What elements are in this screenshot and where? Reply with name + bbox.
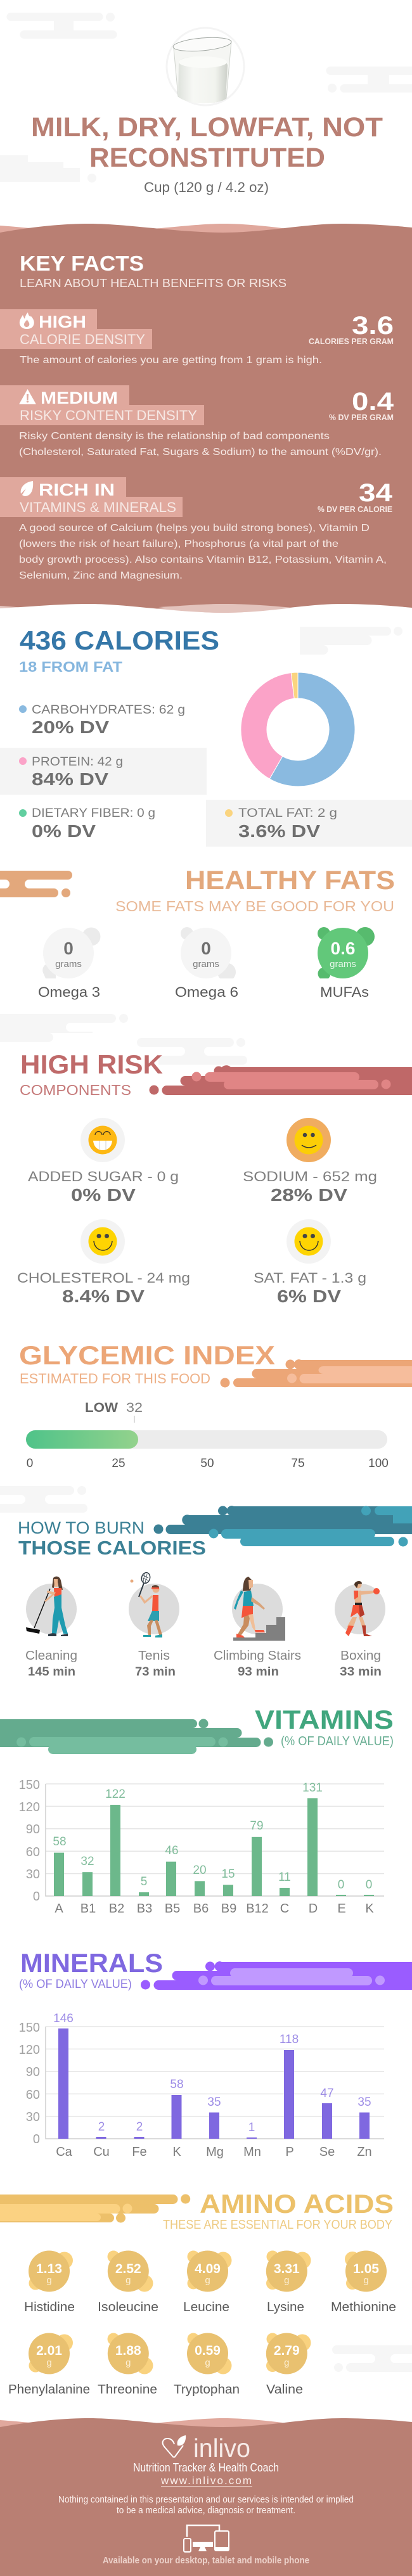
fact: rich in vitamins and minerals: body growth process). Also contains Vitamin B12, Potassium, Vitamin A, xyxy=(19,554,387,565)
title: RECONSTITUTED xyxy=(89,143,325,173)
item: saturated fat: SAT. FAT - 1.3 g xyxy=(254,1270,366,1286)
chart: glycemic index bar: 32 xyxy=(126,1400,143,1415)
item: saturated fat: 6% DV xyxy=(277,1286,341,1306)
stat: valine: Valine xyxy=(266,2383,303,2397)
stat: omega 6: 0 xyxy=(201,939,211,958)
chart: minerals bar chart: 150 xyxy=(19,2021,40,2035)
item: sodium: 28% DV xyxy=(271,1185,347,1205)
heading: glycemic index: GLYCEMIC INDEX xyxy=(19,1340,275,1370)
stat: methionine: g xyxy=(363,2275,369,2286)
heading: key facts: LEARN ABOUT HEALTH BENEFITS OR RISKS xyxy=(20,276,286,290)
chart: minerals bar chart: Ca xyxy=(56,2145,73,2159)
availability note: Available on your desktop, tablet and mobile phone xyxy=(103,2556,309,2566)
chart: vitamins bar chart: B3 xyxy=(137,1902,152,1916)
stat: omega 6: Omega 6 xyxy=(175,984,238,1000)
fact: medium risky content density: MEDIUM xyxy=(41,388,118,407)
logo: inlivo xyxy=(163,2433,250,2463)
activity: boxing: Boxing xyxy=(340,1649,381,1663)
chart: minerals bar chart: 2 xyxy=(136,2120,143,2134)
heading: amino acids: AMINO ACIDS xyxy=(200,2189,394,2219)
fact: high calorie density: CALORIES PER GRAM xyxy=(309,337,394,346)
chart: minerals bar chart: Mn xyxy=(243,2145,261,2159)
chart: vitamins bar chart: 0 xyxy=(338,1878,344,1892)
stat: tryptophan xyxy=(174,2333,240,2397)
chart: vitamins bar chart: D xyxy=(309,1902,318,1916)
chart: vitamins bar chart: B1 xyxy=(80,1902,96,1916)
chart: minerals bar chart: 58 xyxy=(170,2078,184,2091)
item: cholesterol: 8.4% DV xyxy=(62,1286,145,1306)
chart: glycemic index bar: 25 xyxy=(112,1457,126,1470)
stat: phenylalanine: g xyxy=(46,2357,52,2368)
activity: climbing stairs: 93 min xyxy=(238,1665,279,1679)
chart: glycemic index bar: LOW xyxy=(85,1400,118,1415)
heading: key facts: KEY FACTS xyxy=(20,252,144,275)
heading: vitamins: VITAMINS xyxy=(255,1705,394,1734)
legend: dietary fiber xyxy=(19,806,155,841)
chart: vitamins bar chart: 15 xyxy=(221,1868,235,1881)
chart: minerals bar chart: 146 xyxy=(53,2012,74,2025)
heading: minerals: (% OF DAILY VALUE) xyxy=(19,1977,132,1991)
chart: minerals bar chart: Fe xyxy=(132,2145,147,2159)
activity: tennis xyxy=(129,1572,179,1679)
serving size: Cup (120 g / 4.2 oz) xyxy=(144,179,269,195)
heading: vitamins xyxy=(255,1705,394,1748)
heading: amino acids xyxy=(163,2189,394,2232)
heading: how to burn those calories xyxy=(18,1518,206,1559)
activity: boxing xyxy=(335,1581,385,1679)
panel: vitamins xyxy=(0,1705,394,1916)
fact: rich in vitamins and minerals: RICH IN xyxy=(39,480,115,499)
activity: climbing stairs xyxy=(214,1577,301,1679)
chart: vitamins bar chart: 30 xyxy=(26,1868,40,1881)
title xyxy=(31,112,383,173)
chart: vitamins bar chart: 11 xyxy=(278,1871,291,1884)
icon: glass of milk xyxy=(167,28,244,105)
stat: lysine: 3.31 xyxy=(274,2262,300,2276)
heading: key facts xyxy=(20,252,286,290)
chart: minerals bar chart: 2 xyxy=(98,2120,105,2134)
fact: rich in vitamins and minerals: (lowers the risk of heart failure), Phosphorus (a vital part of the xyxy=(19,539,338,549)
fact: rich in vitamins and minerals: VITAMINS & MINERALS xyxy=(20,499,176,515)
chart: vitamins bar chart: 20 xyxy=(193,1864,207,1877)
activity: boxing: 33 min xyxy=(340,1665,382,1679)
icon: devices xyxy=(184,2525,229,2552)
heading: high risk xyxy=(20,1049,163,1098)
chart: vitamins bar chart xyxy=(19,1778,384,1916)
fact: high calorie density: 3.6 xyxy=(352,312,394,340)
stat: lysine: Lysine xyxy=(267,2300,304,2314)
panel: minerals xyxy=(19,1948,412,2159)
fact: high calorie density xyxy=(0,309,394,366)
heading: how to burn those calories: THOSE CALORIES xyxy=(18,1537,206,1559)
heading: how to burn those calories: HOW TO BURN xyxy=(18,1518,145,1537)
activity: tennis: 73 min xyxy=(135,1665,176,1679)
panel: how to burn those calories xyxy=(18,1506,412,1679)
chart: vitamins bar chart: 150 xyxy=(19,1778,40,1792)
stat: isoleucine: Isoleucine xyxy=(98,2300,158,2314)
activity: cleaning: 145 min xyxy=(28,1665,75,1679)
stat: omega 6: grams xyxy=(193,959,219,970)
chart: minerals bar chart: 90 xyxy=(26,2065,40,2079)
chart: glycemic index bar: 75 xyxy=(291,1457,305,1470)
chart: minerals bar chart: 47 xyxy=(320,2087,334,2100)
legend: dietary fiber: 0% DV xyxy=(32,821,96,841)
stat: omega 6 xyxy=(175,927,238,1000)
stat: histidine: g xyxy=(46,2275,52,2286)
chart: vitamins bar chart: B9 xyxy=(221,1902,236,1916)
legend: total fat xyxy=(206,800,412,847)
chart: vitamins bar chart: 0 xyxy=(33,1890,40,1904)
icon: grinning face xyxy=(89,1125,117,1155)
item: added sugar: 0% DV xyxy=(71,1185,136,1205)
stat: threonine: Threonine xyxy=(98,2383,157,2397)
stat: tryptophan: Tryptophan xyxy=(174,2383,240,2397)
stat: tryptophan: 0.59 xyxy=(195,2343,221,2358)
disclaimer: Nothing contained in this presentation and our services is intended or implied xyxy=(58,2494,354,2505)
heading: minerals: MINERALS xyxy=(20,1948,163,1978)
chart: minerals bar chart: 35 xyxy=(207,2096,221,2109)
fact: medium risky content density: Risky Content density is the relationship of bad components xyxy=(19,431,330,442)
chart: glycemic index bar: 100 xyxy=(368,1457,389,1470)
item: cholesterol xyxy=(17,1219,190,1306)
chart: minerals bar chart: 35 xyxy=(357,2096,371,2109)
chart: minerals bar chart: 1 xyxy=(248,2121,255,2134)
fact: medium risky content density: % DV PER GRAM xyxy=(329,413,394,422)
fact: rich in vitamins and minerals: A good source of Calcium (helps you build strong bones), Vitamin D xyxy=(19,523,370,534)
chart: vitamins bar chart: 60 xyxy=(26,1845,40,1859)
panel: healthy fats xyxy=(0,865,395,1000)
chart: vitamins bar chart: K xyxy=(365,1902,374,1916)
chart: glycemic index bar: 50 xyxy=(200,1457,214,1470)
fact: medium risky content density: 0.4 xyxy=(352,388,394,416)
chart: vitamins bar chart: E xyxy=(337,1902,346,1916)
panel: amino acids xyxy=(0,2189,396,2397)
stat: valine xyxy=(266,2333,311,2397)
website link: www.inlivo.com xyxy=(160,2475,252,2487)
stat: threonine: 1.88 xyxy=(115,2343,141,2358)
heading: vitamins: (% OF DAILY VALUE) xyxy=(281,1734,394,1748)
chart: minerals bar chart: 60 xyxy=(26,2088,40,2102)
decoration band: yellow xyxy=(0,2194,190,2223)
stat: threonine: g xyxy=(126,2357,131,2368)
decoration band: orange xyxy=(221,1359,412,1388)
chart: vitamins bar chart: C xyxy=(280,1902,289,1916)
chart: minerals bar chart: Se xyxy=(319,2145,335,2159)
fact: high calorie density: The amount of calories you are getting from 1 gram is high. xyxy=(20,355,322,366)
fact: high calorie density: HIGH xyxy=(39,312,86,331)
chart: vitamins bar chart: 120 xyxy=(19,1800,40,1814)
heading: healthy fats: HEALTHY FATS xyxy=(185,865,395,895)
chart: vitamins bar chart: 79 xyxy=(250,1819,264,1833)
chart: minerals bar chart: Mg xyxy=(206,2145,224,2159)
stat: tryptophan: g xyxy=(205,2357,210,2368)
stat: isoleucine: 2.52 xyxy=(115,2262,141,2276)
stat: isoleucine: g xyxy=(126,2275,131,2286)
legend: protein: 84% DV xyxy=(32,769,108,789)
fact: medium risky content density xyxy=(0,385,394,458)
panel: glycemic index xyxy=(19,1340,412,1470)
chart: vitamins bar chart: B12 xyxy=(246,1902,269,1916)
heading: calories xyxy=(19,625,219,675)
stat: mufas: grams xyxy=(330,959,356,970)
chart: vitamins bar chart: 90 xyxy=(26,1823,40,1836)
chart: vitamins bar chart: 46 xyxy=(165,1844,179,1857)
icon: person sweeping xyxy=(26,1577,68,1636)
stat: mufas: MUFAs xyxy=(320,984,369,1000)
legend: dietary fiber: DIETARY FIBER: 0 g xyxy=(32,806,155,820)
stat: mufas: 0.6 xyxy=(331,939,355,958)
fact: medium risky content density: (Cholesterol, Saturated Fat, Sugars & Sodium) to the amount (%DV/gr). xyxy=(19,447,382,458)
chart: minerals bar chart: Cu xyxy=(93,2145,110,2159)
stat: leucine: g xyxy=(205,2275,210,2286)
title: MILK, DRY, LOWFAT, NOT xyxy=(31,112,383,143)
stat: phenylalanine xyxy=(8,2333,90,2397)
chart: minerals bar chart: 118 xyxy=(280,2033,299,2046)
activity: tennis: Tenis xyxy=(138,1649,170,1663)
decoration band: red xyxy=(150,1065,412,1095)
heading: high risk: COMPONENTS xyxy=(20,1082,131,1098)
icon: smiling face xyxy=(294,1125,323,1155)
chart: vitamins bar chart: 122 xyxy=(105,1788,126,1801)
chart: vitamins bar chart: B6 xyxy=(193,1902,209,1916)
stat: histidine: Histidine xyxy=(24,2300,75,2314)
chart: vitamins bar chart: 131 xyxy=(302,1781,323,1795)
stat: phenylalanine: 2.01 xyxy=(36,2343,62,2358)
heading: healthy fats: SOME FATS MAY BE GOOD FOR YOU xyxy=(115,898,394,914)
heading: calories: 436 CALORIES xyxy=(20,625,219,655)
chart: vitamins bar chart: 32 xyxy=(80,1855,94,1868)
stat: valine: g xyxy=(284,2357,289,2368)
stat: methionine: 1.05 xyxy=(353,2262,379,2276)
item: cholesterol: CHOLESTEROL - 24 mg xyxy=(17,1270,190,1286)
chart: minerals bar chart: 120 xyxy=(19,2043,40,2057)
panel: calories xyxy=(0,625,412,847)
chart: minerals bar chart: Zn xyxy=(357,2145,372,2159)
icon: smiling face xyxy=(89,1227,117,1256)
stat: phenylalanine: Phenylalanine xyxy=(8,2383,90,2397)
stat: leucine: Leucine xyxy=(183,2300,229,2314)
disclaimer: to be a medical advice, diagnosis or treatment. xyxy=(117,2505,295,2516)
fact: rich in vitamins and minerals: % DV PER CALORIE xyxy=(318,505,392,514)
icon: stairs and climber xyxy=(233,1577,285,1641)
chart: minerals bar chart xyxy=(19,2012,384,2159)
activity: climbing stairs: Climbing Stairs xyxy=(214,1649,301,1663)
legend: carbohydrates: 20% DV xyxy=(32,717,109,737)
icon: tennis player xyxy=(131,1572,162,1637)
item: added sugar: ADDED SUGAR - 0 g xyxy=(28,1169,179,1184)
chart: glycemic index bar: 0 xyxy=(27,1457,33,1470)
disclaimer xyxy=(58,2494,354,2516)
icon: flame xyxy=(20,312,34,329)
chart: minerals bar chart: P xyxy=(285,2145,294,2159)
fact: medium risky content density: RISKY CONTENT DENSITY xyxy=(20,407,197,423)
fact: rich in vitamins and minerals xyxy=(0,477,393,581)
icon: boxer xyxy=(345,1581,380,1636)
heading: minerals xyxy=(19,1948,163,1991)
chart: minerals bar chart: K xyxy=(172,2145,181,2159)
stat: methionine: Methionine xyxy=(331,2300,396,2314)
stat: leucine xyxy=(183,2251,232,2314)
stat: isoleucine xyxy=(98,2251,158,2314)
item: saturated fat xyxy=(254,1219,366,1306)
decoration band: teal xyxy=(153,1506,412,1546)
heading: healthy fats xyxy=(115,865,395,914)
logo: inlivo: inlivo xyxy=(193,2433,250,2463)
icon: smiling face xyxy=(294,1227,323,1256)
legend: carbohydrates xyxy=(19,703,185,737)
stat: mufas xyxy=(318,927,375,1000)
chart: vitamins bar chart: B5 xyxy=(165,1902,180,1916)
heading: glycemic index: ESTIMATED FOR THIS FOOD xyxy=(20,1371,210,1387)
panel: footer xyxy=(0,2418,412,2576)
legend: total fat: 3.6% DV xyxy=(238,821,320,841)
heading: glycemic index xyxy=(19,1340,275,1387)
stat: threonine xyxy=(98,2333,157,2397)
icon: warning triangle xyxy=(19,389,36,404)
tagline: Nutrition Tracker & Health Coach xyxy=(133,2461,279,2474)
item: added sugar xyxy=(28,1118,179,1205)
chart: vitamins bar chart: B2 xyxy=(109,1902,124,1916)
chart: vitamins bar chart: 0 xyxy=(366,1878,372,1892)
stat: omega 3: grams xyxy=(55,959,82,970)
chart: vitamins bar chart: A xyxy=(55,1902,63,1916)
legend: carbohydrates: CARBOHYDRATES: 62 g xyxy=(32,703,185,717)
panel: high risk components xyxy=(17,1049,412,1306)
heading: high risk: HIGH RISK xyxy=(20,1049,163,1079)
stat: valine: 2.79 xyxy=(274,2343,300,2358)
chart: macronutrient donut xyxy=(241,672,355,786)
chart: glycemic index bar xyxy=(26,1400,389,1470)
stat: histidine: 1.13 xyxy=(36,2262,62,2276)
icon: leaf xyxy=(21,481,33,496)
decoration band: green xyxy=(0,1719,273,1754)
activity: cleaning: Cleaning xyxy=(25,1649,77,1663)
heading: calories: 18 FROM FAT xyxy=(19,658,123,675)
fact: high calorie density: CALORIE DENSITY xyxy=(20,331,145,347)
item: sodium: SODIUM - 652 mg xyxy=(243,1169,377,1184)
stat: histidine xyxy=(24,2251,75,2314)
stat: omega 3: 0 xyxy=(63,939,74,958)
legend: protein: PROTEIN: 42 g xyxy=(32,755,123,769)
stat: lysine xyxy=(266,2251,311,2314)
legend: total fat: TOTAL FAT: 2 g xyxy=(238,806,337,820)
chart: vitamins bar chart: 5 xyxy=(141,1875,147,1888)
fact: rich in vitamins and minerals: Selenium, Zinc and Magnesium. xyxy=(19,570,183,581)
decoration band: purple xyxy=(141,1961,412,1990)
chart: minerals bar chart: 0 xyxy=(33,2132,40,2146)
stat: omega 3 xyxy=(38,928,100,1000)
stat: omega 3: Omega 3 xyxy=(38,984,100,1000)
heading: amino acids: THESE ARE ESSENTIAL FOR YOUR BODY xyxy=(163,2218,392,2232)
chart: vitamins bar chart: 58 xyxy=(53,1835,67,1849)
legend: protein xyxy=(0,748,207,795)
item: sodium xyxy=(243,1118,377,1205)
chart: minerals bar chart: 30 xyxy=(26,2110,40,2124)
stat: methionine xyxy=(331,2251,396,2314)
fact: rich in vitamins and minerals: 34 xyxy=(359,479,393,507)
stat: lysine: g xyxy=(284,2275,289,2286)
activity: cleaning xyxy=(25,1577,77,1679)
panel: key facts xyxy=(0,224,412,627)
stat: leucine: 4.09 xyxy=(195,2262,221,2276)
